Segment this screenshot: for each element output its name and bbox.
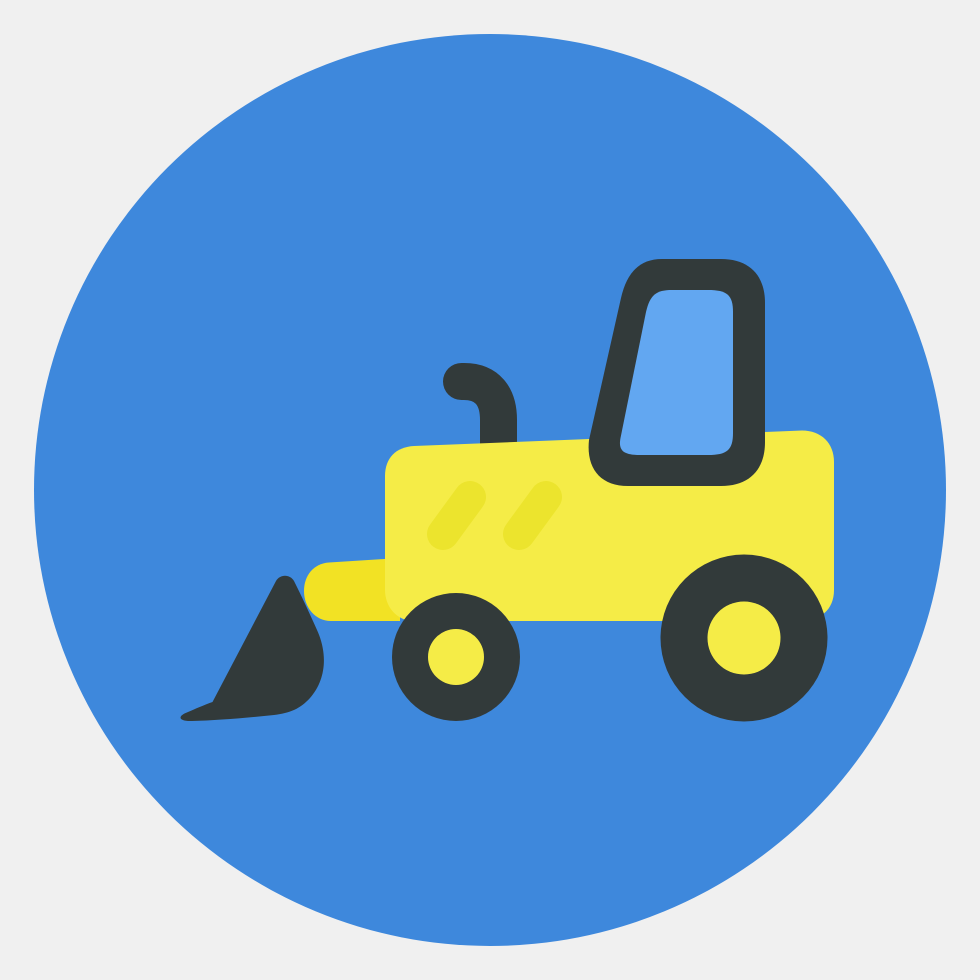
icon: loader bucket	[181, 576, 324, 721]
icon: cab window	[620, 290, 733, 455]
icon: tractor body	[385, 430, 834, 621]
icon: cab	[589, 259, 765, 486]
icon: front wheel	[392, 593, 520, 721]
icon: rear wheel	[660, 554, 828, 722]
icon: exhaust pipe	[462, 382, 498, 450]
icon: body highlight stripes	[443, 497, 546, 534]
icon: loader arm	[304, 558, 400, 621]
